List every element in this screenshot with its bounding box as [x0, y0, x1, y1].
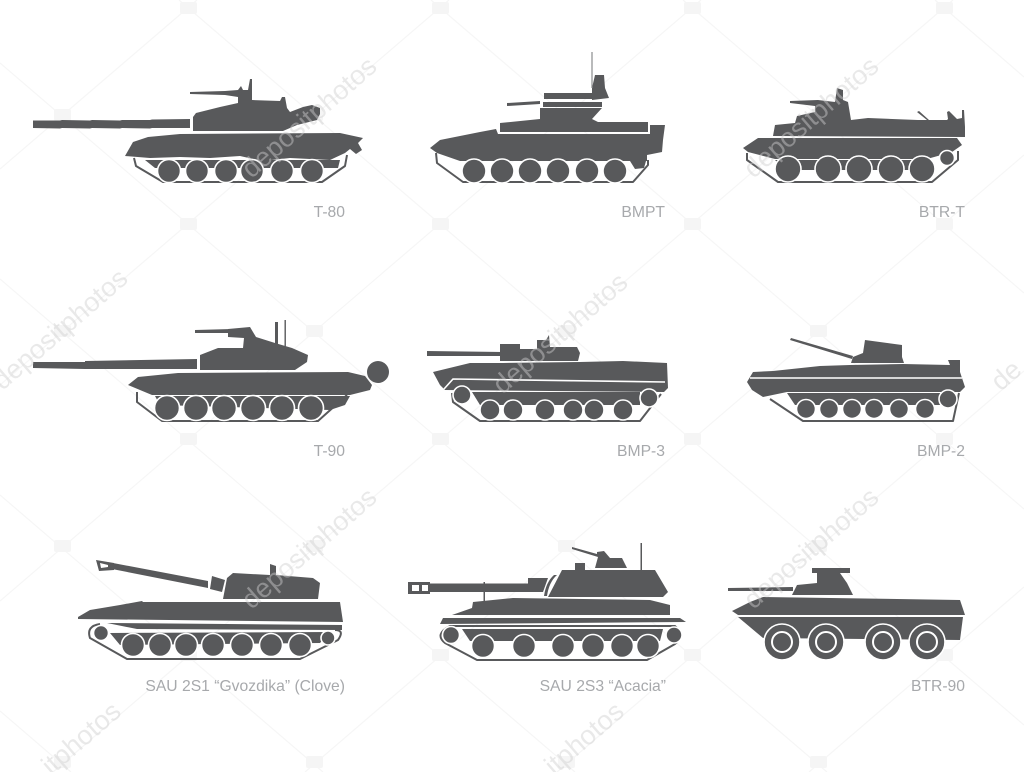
- T-90 gun and turret: [33, 320, 308, 370]
- 2S3 hull: [452, 598, 670, 615]
- BTR-90 lower hull: [738, 617, 963, 640]
- vehicle: T-80 tank: [33, 79, 363, 182]
- 2S3 howitzer: [408, 575, 557, 596]
- 2S1 upper track strip: [107, 623, 342, 630]
- BMP-2 track and lower hull: [770, 393, 959, 421]
- label: BMP-3: BMP-3: [617, 443, 665, 460]
- BTR-T road wheels: [775, 150, 954, 182]
- BTR-T track: [747, 151, 958, 182]
- watermark text: depositphotos: [236, 482, 382, 615]
- T-90 hull: [128, 372, 372, 395]
- BMP-2 hull: [747, 360, 965, 397]
- T-90 road wheels: [154, 396, 324, 420]
- BTR-90 wheels: [764, 624, 945, 660]
- BTR-90 wheel hubs: [772, 632, 937, 652]
- 2S1 road wheels: [94, 626, 335, 656]
- label: BTR-T: BTR-T: [919, 204, 965, 221]
- BTR-T turret and upper hull: [773, 88, 965, 137]
- vehicle: BTR-T: [743, 88, 965, 182]
- T-90 track: [137, 392, 347, 421]
- 2S3 track: [441, 626, 680, 660]
- BMPT road wheels: [462, 159, 627, 183]
- BMP-2 turret and gun: [790, 338, 904, 363]
- BMPT antenna: [591, 52, 593, 88]
- label: BMPT: BMPT: [621, 204, 665, 221]
- BMP-3 hull: [433, 361, 668, 392]
- BMP-2 white seam: [750, 377, 962, 379]
- T-90 mine roller: [367, 361, 389, 383]
- watermark text: depositphotos: [738, 482, 884, 615]
- T-80 hull: [125, 133, 363, 161]
- T-80 turret and gun: [33, 79, 320, 131]
- BTR-T hull: [743, 138, 962, 159]
- BMP-3 track and lower hull: [452, 392, 661, 421]
- 2S3 turret: [548, 563, 668, 597]
- BTR-90 hull: [732, 597, 965, 615]
- label: BMP-2: BMP-2: [917, 443, 965, 460]
- T-80 track: [134, 155, 347, 182]
- label: SAU 2S3: SAU 2S3 “Acacia”: [540, 678, 666, 695]
- BMP-2 road wheels: [796, 390, 957, 418]
- T-80 road wheels: [158, 160, 324, 182]
- watermark text: depositphotos: [738, 51, 884, 184]
- 2S3 road wheels: [442, 626, 682, 658]
- label: T-90: T-90: [314, 443, 345, 460]
- vehicle: SAU 2S3 Acacia: [408, 543, 686, 660]
- 2S3 fender: [440, 618, 686, 624]
- label: BTR-90: BTR-90: [911, 678, 965, 695]
- vehicle: SAU 2S1 Gvozdika: [78, 560, 343, 659]
- 2S3 machine gun and antenna: [484, 543, 642, 603]
- 2S1 hull: [78, 601, 343, 622]
- BMP-3 turret and gun: [427, 335, 580, 361]
- BMP-3 road wheels: [453, 386, 658, 420]
- vehicle: BTR-90: [728, 568, 965, 660]
- BTR-90 turret and cannon: [728, 568, 853, 595]
- 2S1 turret and howitzer: [96, 560, 320, 599]
- vehicle: BMP-2: [747, 338, 965, 421]
- watermark text: depositphotos: [236, 51, 382, 184]
- BMPT track: [436, 153, 648, 182]
- 2S1 track: [89, 624, 341, 659]
- watermark text: depositphotos: [487, 267, 633, 400]
- label: SAU 2S1: SAU 2S1 “Gvozdika” (Clove): [145, 678, 345, 695]
- vehicle: BMP-3: [427, 335, 668, 421]
- BMP-3 white seam: [444, 379, 665, 389]
- vehicle: BMPT: [430, 52, 665, 183]
- BMPT hull: [430, 125, 665, 161]
- label: T-80: T-80: [314, 204, 345, 221]
- vehicle: T-90 tank: [33, 320, 389, 421]
- BMPT turret and weapons: [500, 75, 648, 132]
